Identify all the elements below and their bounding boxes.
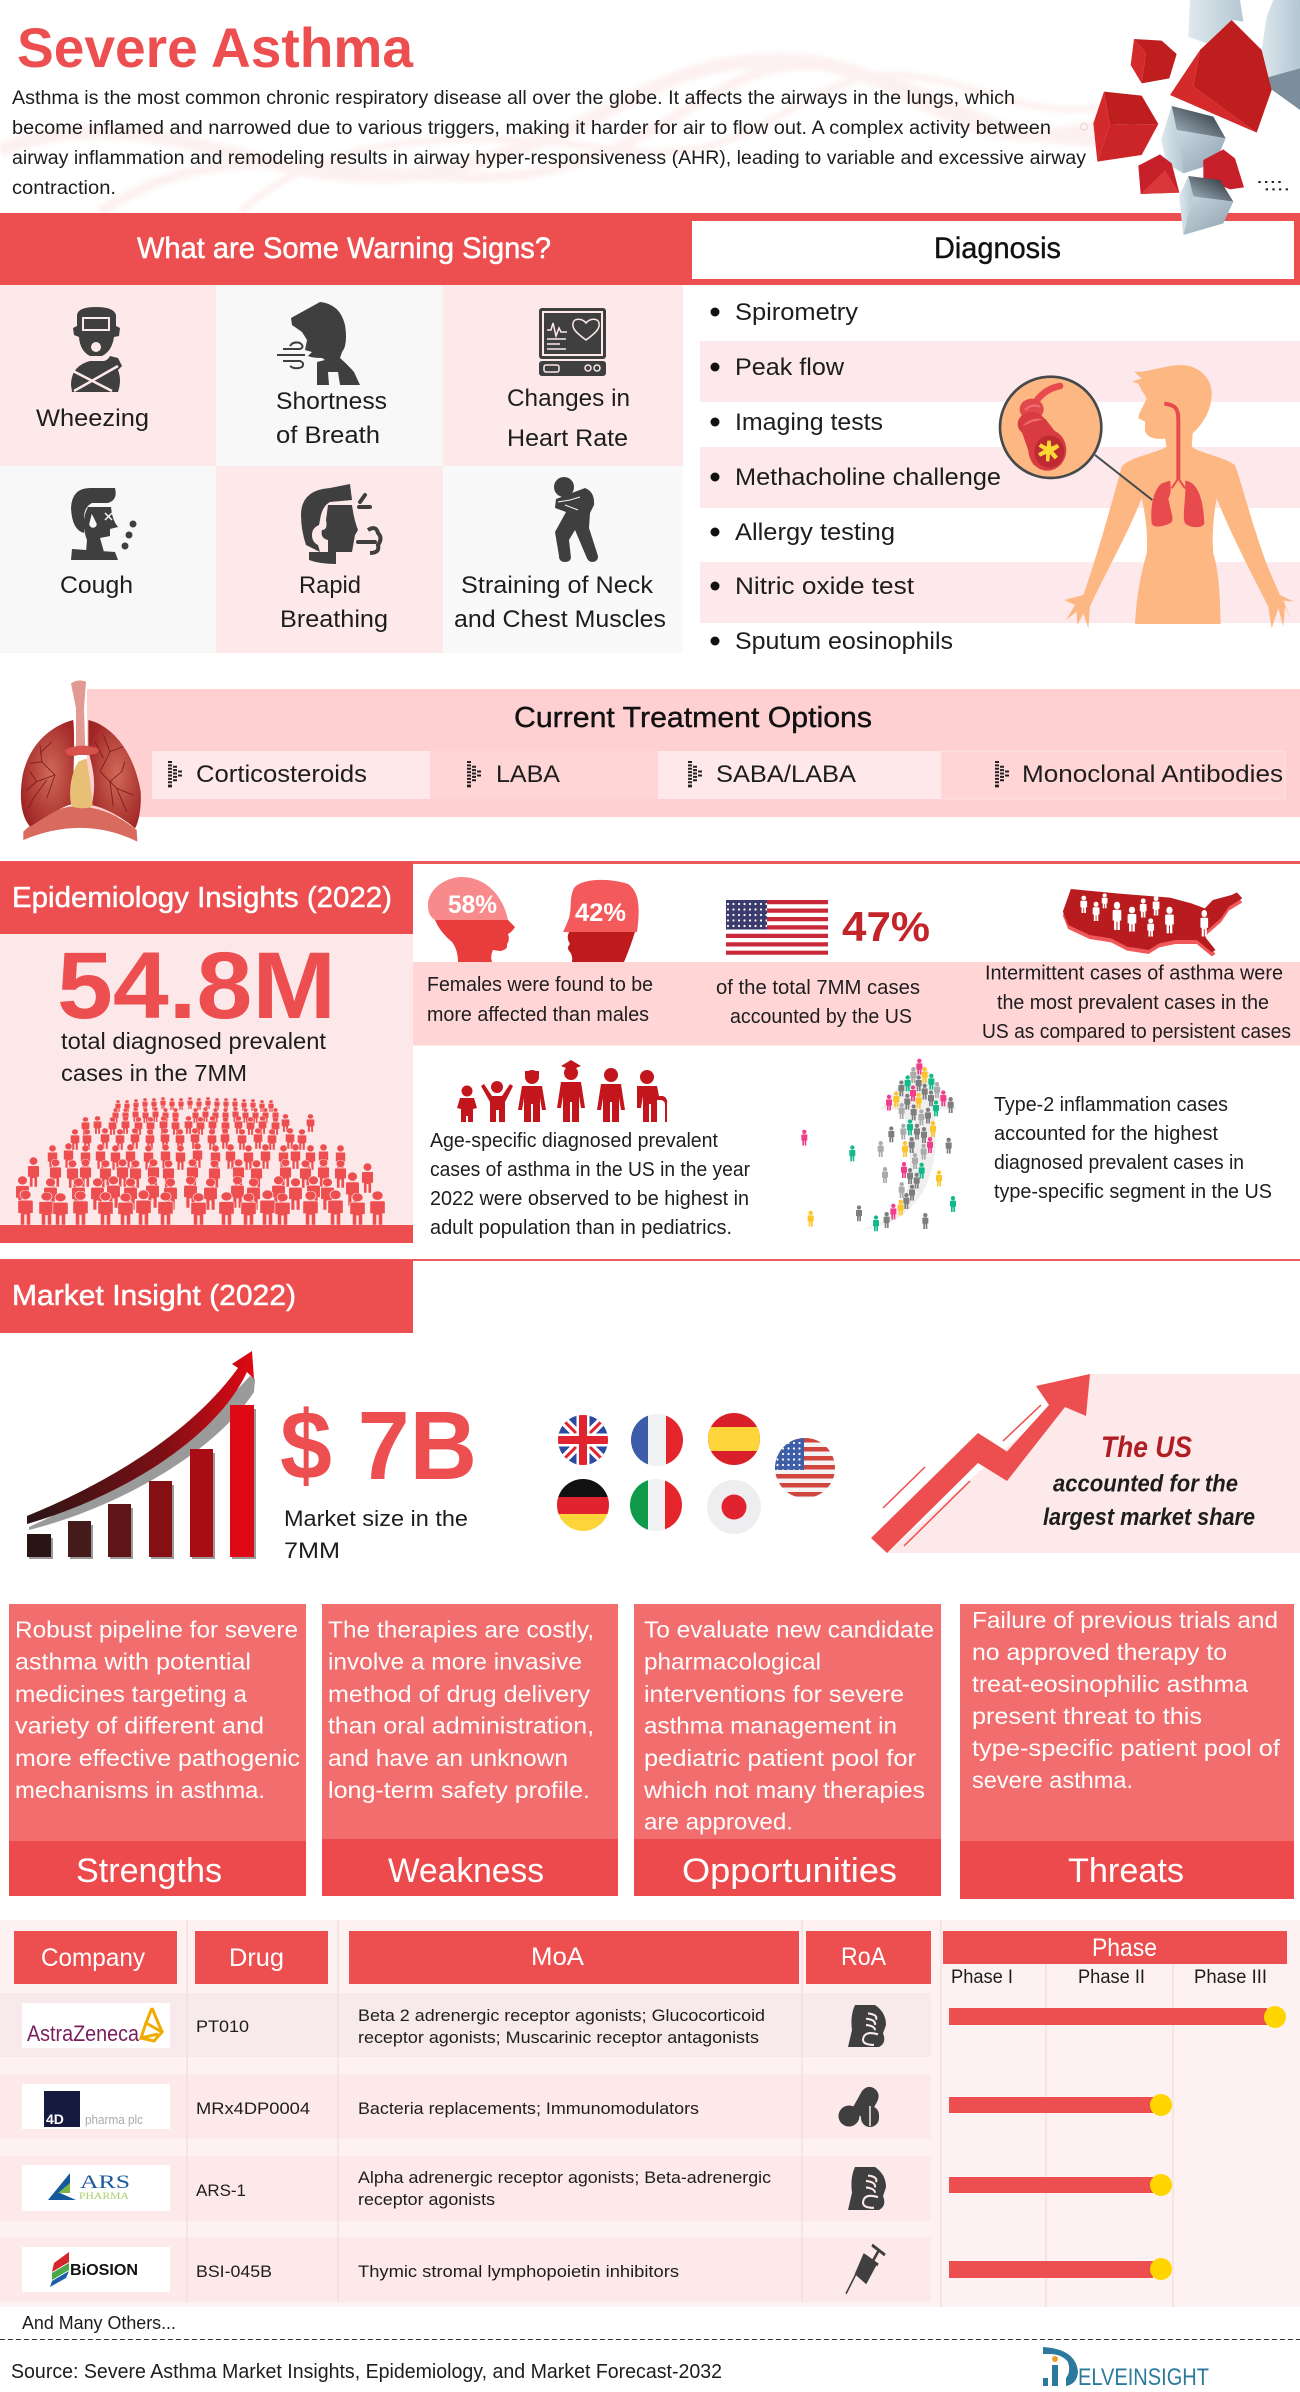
row: MRx4DP0004: Bacteria replacements; Immunomodulators	[358, 2099, 699, 2118]
heading: warning signs: What are Some Warning Signs?	[137, 232, 551, 265]
treatment items: Corticosteroids	[196, 761, 367, 788]
text: age-specific: adult population than in pediatrics.	[430, 1217, 732, 1239]
label: straining of neck and chest muscles: Straining of Neck	[461, 572, 654, 599]
row: ARS-1: receptor agonists	[358, 2190, 495, 2209]
logo: DelveInsight	[1043, 2347, 1209, 2391]
illustration: lungs	[21, 680, 141, 842]
list of diagnostic tests: Sputum eosinophils	[735, 628, 953, 655]
logo: AstraZeneca: AstraZeneca	[27, 2021, 140, 2046]
SWOT: opportunities: pharmacological	[644, 1648, 821, 1674]
table headers: Phase	[1092, 1934, 1157, 1962]
label: shortness of breath: Shortness	[276, 388, 387, 415]
flag: USA	[775, 1438, 835, 1498]
text: age-specific: Age-specific diagnosed prevalent	[430, 1130, 718, 1152]
SWOT: threats: treat-eosinophilic asthma	[972, 1671, 1248, 1697]
row: ARS-1: Alpha adrenergic receptor agonists; Beta-adrenergic	[358, 2168, 772, 2187]
illustration: human body with lungs	[1000, 365, 1294, 628]
list of diagnostic tests: Peak flow	[735, 354, 845, 381]
icon: pills	[838, 2087, 879, 2127]
list of diagnostic tests	[735, 299, 1001, 655]
intro paragraph: contraction.	[12, 178, 116, 199]
SWOT: strengths: variety of different and	[15, 1712, 264, 1738]
SWOT: strengths: Robust pipeline for severe	[15, 1616, 298, 1642]
table headers: Company	[41, 1944, 145, 1972]
label: changes in heart rate	[507, 385, 630, 452]
SWOT: strengths: Strengths	[76, 1852, 222, 1890]
SWOT: opportunities: Opportunities	[682, 1852, 897, 1890]
caption: total diagnosed prevalent	[61, 1028, 327, 1054]
icon: male head 42%: 42%	[575, 899, 626, 927]
text: US share: accounted by the US	[730, 1006, 912, 1028]
text: intermittent cases: Intermittent cases of asthma were	[985, 962, 1283, 984]
panel: warning signs grid	[0, 285, 683, 653]
SWOT: weakness: involve a more invasive	[328, 1648, 582, 1674]
text: type-2 inflammation: diagnosed prevalent cases in	[994, 1152, 1244, 1174]
table headers: MoA	[531, 1943, 584, 1971]
source: Source: Severe Asthma Market Insights, Epidemiology, and Market Forecast-2032	[11, 2361, 722, 2383]
SWOT: strengths: mechanisms in asthma.	[15, 1777, 265, 1803]
label: cough: Cough	[60, 572, 133, 599]
text: type-2 inflammation: type-specific segment in the US	[994, 1181, 1272, 1203]
SWOT: strengths	[9, 1604, 306, 1896]
background swirl	[0, 60, 1130, 212]
SWOT: threats: type-specific patient pool of	[972, 1735, 1281, 1761]
row: MRx4DP0004	[22, 2084, 1172, 2129]
flag: France	[631, 1414, 683, 1466]
caption	[61, 1028, 327, 1086]
SWOT: weakness: than oral administration,	[328, 1712, 594, 1738]
text: US share	[716, 977, 920, 1028]
logo: ARS Pharma: ARS	[80, 2172, 130, 2193]
big number: 54.8M	[57, 933, 336, 1039]
text: gender	[427, 974, 653, 1026]
SWOT: opportunities: To evaluate new candidate	[644, 1616, 934, 1642]
SWOT: threats: Threats	[1068, 1852, 1184, 1890]
text: type-2 inflammation: Type-2 inflammation cases	[994, 1094, 1228, 1116]
icon: wheezing	[71, 307, 122, 392]
text: age-specific: cases of asthma in the US in the year	[430, 1159, 750, 1181]
divider line: market	[0, 1259, 1300, 1261]
table headers: Phase II	[1078, 1967, 1145, 1988]
icon: US map	[1063, 889, 1242, 956]
SWOT: weakness: and have an unknown	[328, 1745, 568, 1771]
list of diagnostic tests: Imaging tests	[735, 409, 883, 436]
text: The US	[1101, 1431, 1192, 1464]
logo: AstraZeneca	[22, 2003, 170, 2048]
stat: 47%: 47%	[842, 903, 930, 950]
table headers	[14, 1931, 1287, 1988]
SWOT: weakness: Weakness	[388, 1852, 544, 1890]
SWOT: threats: Failure of previous trials and	[972, 1607, 1278, 1633]
decorative cubes	[1081, 0, 1300, 235]
text: type-2 inflammation: accounted for the highest	[994, 1123, 1218, 1145]
SWOT: opportunities	[634, 1604, 941, 1896]
SWOT: strengths: more effective pathogenic	[15, 1745, 300, 1771]
row: ARS-1	[22, 2165, 1172, 2211]
heading: treatment: Current Treatment Options	[514, 702, 872, 734]
treatment items: SABA/LABA	[716, 761, 856, 788]
row: MRx4DP0004: MRx4DP0004	[196, 2099, 310, 2118]
logo: ARS Pharma	[22, 2165, 170, 2211]
arrow	[871, 1374, 1090, 1553]
label: straining of neck and chest muscles: and Chest Muscles	[454, 606, 666, 633]
text: type-2 inflammation	[994, 1094, 1272, 1203]
SWOT: threats: severe asthma.	[972, 1767, 1133, 1793]
icon: heart rate monitor	[539, 308, 606, 376]
table headers: Drug	[229, 1944, 284, 1972]
SWOT: opportunities: interventions for severe	[644, 1681, 904, 1707]
SWOT: strengths: medicines targeting a	[15, 1681, 247, 1707]
text: gender: more affected than males	[427, 1004, 649, 1026]
SWOT: weakness: The therapies are costly,	[328, 1616, 594, 1642]
logo: ARS Pharma: PHARMA	[79, 2191, 130, 2201]
logo: 4D pharma	[22, 2084, 170, 2129]
icon: female head 58%: 58%	[448, 891, 497, 919]
caption: market size: 7MM	[284, 1538, 340, 1563]
table headers: Phase I	[951, 1967, 1013, 1988]
row: ARS-1: ARS-1	[196, 2181, 246, 2200]
note: and many others: And Many Others...	[22, 2313, 176, 2333]
treatment items: Monoclonal Antibodies	[1022, 761, 1283, 788]
panel: gender and US share band	[413, 877, 1300, 1046]
caption: market size	[284, 1506, 468, 1563]
heading band: market insight: Market Insight (2022)	[12, 1280, 296, 1312]
callout: US largest market share: largest market share	[1043, 1504, 1255, 1531]
text: gender: Females were found to be	[427, 974, 653, 996]
header band: warning signs and diagnosis	[0, 213, 1300, 285]
row: PT010: receptor agonists; Muscarinic receptor antagonists	[358, 2028, 759, 2047]
icon: female head 58%	[428, 877, 515, 962]
row: BSI-045B: Thymic stromal lymphopoietin inhibitors	[358, 2262, 679, 2281]
row: BSI-045B	[22, 2245, 1172, 2294]
icon: age groups family	[457, 1060, 667, 1122]
flags of the 7MM	[555, 1412, 835, 1534]
table headers: RoA	[841, 1943, 886, 1971]
treatment items: LABA	[496, 761, 560, 788]
SWOT: threats: no approved therapy to	[972, 1639, 1227, 1665]
text: US share: of the total 7MM cases	[716, 977, 920, 999]
SWOT: weakness	[322, 1604, 618, 1896]
flag: Italy	[630, 1478, 683, 1534]
table: pipeline	[0, 1920, 1300, 2307]
logo: 4D pharma: 4D	[46, 2111, 64, 2127]
icon: syringe	[846, 2245, 885, 2294]
icon: male head 42%	[563, 880, 639, 962]
callout: US largest market share: accounted for the	[1053, 1470, 1238, 1498]
SWOT: strengths: asthma with potential	[15, 1648, 251, 1674]
list of diagnostic tests: Nitric oxide test	[735, 573, 914, 600]
flag: Japan	[707, 1480, 761, 1534]
heading: epidemiology: Epidemiology Insights (2022)	[12, 882, 392, 914]
list of diagnostic tests: Methacholine challenge	[735, 464, 1001, 491]
logo: DelveInsight: ELVEINSIGHT	[1078, 2364, 1209, 2391]
row: PT010: Beta 2 adrenergic receptor agonists; Glucocorticoid	[358, 2006, 765, 2025]
list of diagnostic tests: Spirometry	[735, 299, 858, 326]
SWOT: opportunities: asthma management in	[644, 1712, 897, 1738]
intro paragraph	[12, 88, 1087, 199]
title: Severe Asthma	[17, 16, 414, 79]
caption: cases in the 7MM	[61, 1060, 247, 1086]
SWOT: weakness: long-term safety profile.	[328, 1777, 590, 1803]
icon: cough	[71, 488, 136, 560]
text: intermittent cases: the most prevalent cases in the	[997, 992, 1269, 1014]
SWOT: opportunities: which not many therapies	[643, 1777, 925, 1803]
illustration: arrow of people	[801, 1059, 957, 1231]
heading band: market insight	[0, 1260, 413, 1333]
label: changes in heart rate: Heart Rate	[507, 425, 628, 452]
text: age-specific	[430, 1130, 750, 1239]
flag: UK	[558, 1415, 608, 1465]
callout: US largest market share	[871, 1374, 1300, 1553]
logo: 4D pharma: pharma plc	[85, 2112, 143, 2127]
text: age-specific: 2022 were observed to be highest in	[430, 1188, 749, 1210]
crowd of people	[16, 1097, 385, 1225]
panel: epidemiology left	[0, 862, 413, 1243]
SWOT: opportunities: are approved.	[644, 1808, 793, 1834]
SWOT: threats	[960, 1604, 1294, 1899]
icon: shortness of breath	[277, 302, 360, 385]
label: rapid breathing: Breathing	[280, 606, 388, 633]
label: shortness of breath: of Breath	[276, 422, 380, 449]
SWOT: threats: present threat to this	[972, 1703, 1202, 1729]
label: rapid breathing: Rapid	[299, 572, 361, 599]
label: shortness of breath	[276, 388, 387, 449]
text: intermittent cases: US as compared to persistent cases	[982, 1021, 1291, 1043]
flag: Spain	[708, 1413, 760, 1465]
row: BSI-045B: BSI-045B	[196, 2262, 272, 2281]
divider line: epidemiology	[0, 861, 1300, 864]
label: changes in heart rate: Changes in	[507, 385, 630, 412]
panel: current treatment options	[87, 689, 1300, 817]
stat: market size: $ 7B	[280, 1391, 477, 1500]
row: PT010	[22, 2003, 1286, 2048]
icon: US flag	[726, 900, 828, 955]
treatment items	[168, 761, 1283, 788]
heading: diagnosis: Diagnosis	[934, 232, 1061, 265]
row: PT010: PT010	[196, 2017, 249, 2036]
label: rapid breathing	[280, 572, 388, 633]
chart: growth bars with arrow	[27, 1351, 256, 1559]
table headers: Phase III	[1194, 1967, 1267, 1988]
logo: Biosion: BiOSION	[70, 2262, 138, 2279]
label: straining of neck and chest muscles	[454, 572, 666, 633]
flag: Germany	[557, 1479, 609, 1531]
icon: straining of chest	[554, 477, 598, 562]
intro paragraph: airway inflammation and remodeling results in airway hyper-responsiveness (AHR), leading to variable and excessive airway	[12, 148, 1087, 169]
icon: rapid breathing	[301, 484, 380, 564]
caption: market size: Market size in the	[284, 1506, 468, 1531]
panel: diagnosis list	[700, 299, 1300, 655]
SWOT: weakness: method of drug delivery	[328, 1681, 591, 1707]
intro paragraph: become inflamed and narrowed due to various triggers, making it harder for air to flow out. A complex activity between	[12, 118, 1051, 139]
intro paragraph: Asthma is the most common chronic respiratory disease all over the globe. It affects the airways in the lungs, which	[12, 88, 1015, 109]
text: intermittent cases	[982, 962, 1291, 1043]
list of diagnostic tests: Allergy testing	[735, 519, 895, 546]
label: wheezing: Wheezing	[36, 405, 149, 432]
logo: Biosion	[22, 2247, 170, 2292]
SWOT: opportunities: pediatric patient pool for	[644, 1745, 916, 1771]
